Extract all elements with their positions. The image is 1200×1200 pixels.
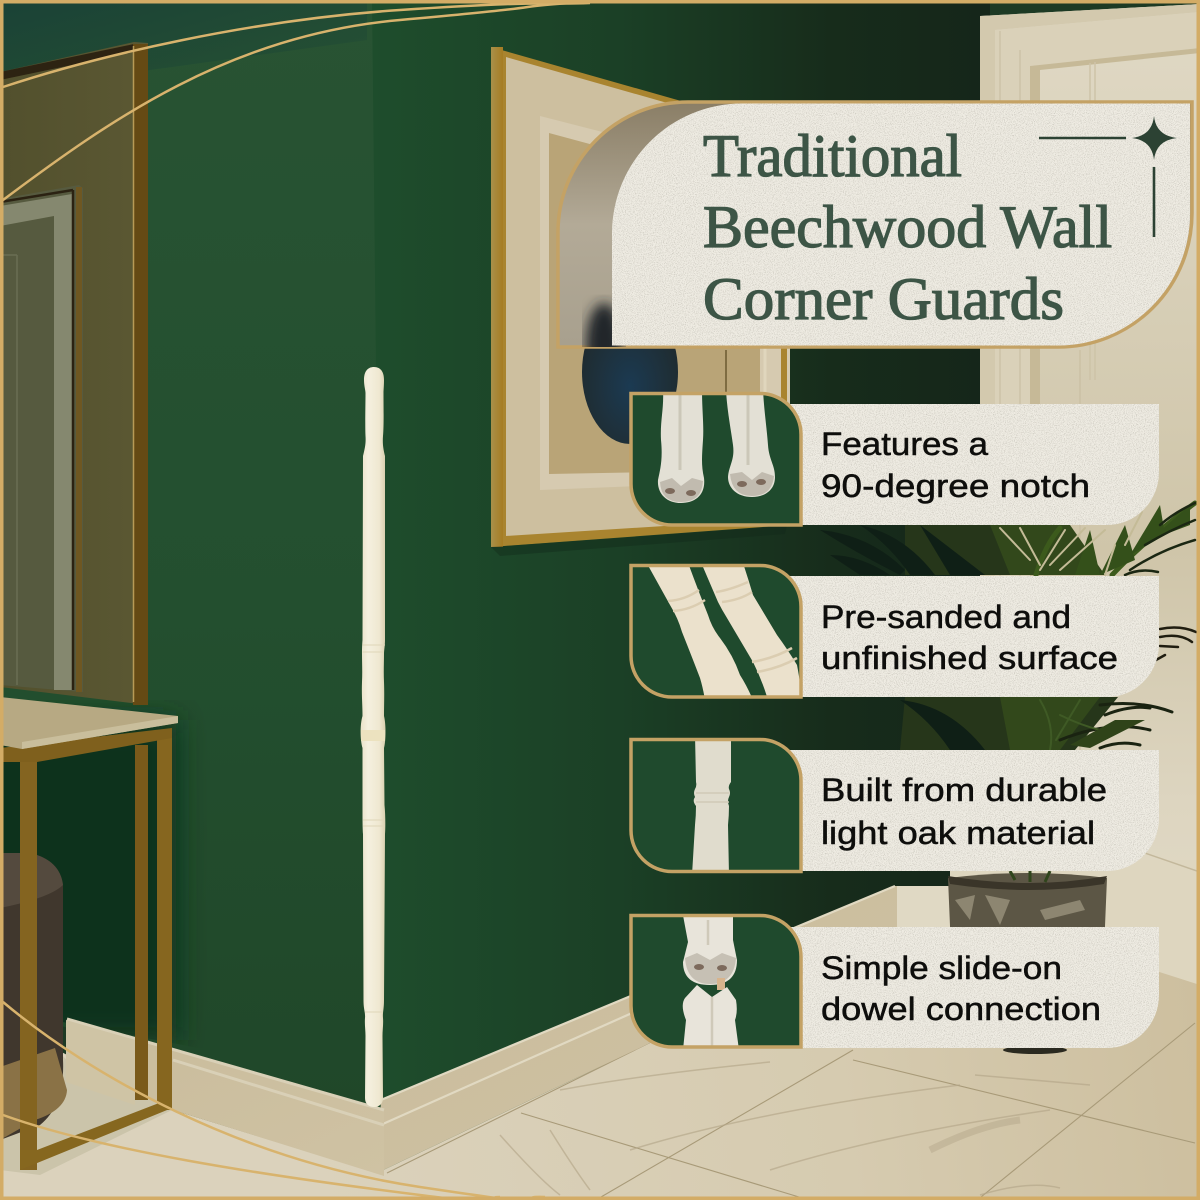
canvas bbox=[549, 133, 760, 474]
abstract blob bbox=[582, 300, 678, 444]
panel: feature 2 bbox=[631, 560, 1159, 700]
frame highlight side bbox=[491, 47, 503, 547]
dark reflection through glass bbox=[582, 295, 626, 347]
panel: feature 4 bbox=[631, 910, 1159, 1050]
door baseboard top line bbox=[1107, 840, 1200, 872]
feature text: Built from durable bbox=[821, 772, 1107, 808]
frame shadow bbox=[491, 526, 787, 556]
curve bottom inner bbox=[3, 1115, 509, 1200]
feature text: Simple slide-on bbox=[821, 950, 1062, 986]
feature text bbox=[821, 772, 1107, 851]
feature text: Features a bbox=[821, 426, 988, 462]
frosted glass backing with gold outline bbox=[558, 102, 1192, 347]
table right leg bbox=[157, 730, 172, 1110]
card bbox=[790, 404, 1159, 525]
outer frame bbox=[491, 47, 790, 547]
card bbox=[790, 927, 1159, 1048]
panel: feature 1 bbox=[631, 390, 1159, 525]
bright palm fronds bbox=[1000, 503, 1196, 750]
foliage mass bbox=[900, 525, 1118, 750]
feature text bbox=[821, 599, 1118, 676]
floor bbox=[0, 905, 1200, 1200]
table apron bbox=[0, 728, 172, 762]
table front leg bbox=[20, 748, 37, 1170]
card bbox=[790, 576, 1159, 697]
baseboard end block bbox=[897, 886, 950, 960]
table marble top bbox=[0, 697, 178, 749]
baseboard: left wall bbox=[67, 1019, 384, 1176]
mirror on left wall bbox=[0, 42, 148, 705]
card texture bbox=[790, 576, 1159, 697]
table back legs bbox=[135, 745, 148, 1100]
floor under table bbox=[0, 1000, 172, 1175]
feature text: unfinished surface bbox=[821, 640, 1118, 676]
table bottom bar bbox=[20, 1098, 172, 1170]
mirror reflection of door bbox=[0, 185, 83, 692]
panel: feature 3 bbox=[631, 735, 1159, 875]
pot bbox=[948, 873, 1107, 1054]
door and frame bbox=[980, 4, 1200, 1000]
corner guard product bbox=[361, 367, 386, 1107]
thumbnail: sanded surface bbox=[631, 560, 802, 700]
card bbox=[790, 750, 1159, 871]
feature text: dowel connection bbox=[821, 991, 1101, 1027]
feature text bbox=[821, 950, 1101, 1027]
wall: left bbox=[0, 0, 384, 1110]
decorative gold curves bbox=[3, 3, 590, 1200]
wall: right bbox=[367, 0, 990, 1176]
stool bbox=[0, 853, 67, 1140]
baseboard moulding lines bbox=[376, 886, 895, 1127]
cream panel bbox=[612, 104, 1190, 346]
inner mat bbox=[540, 116, 790, 490]
feature text: 90-degree notch bbox=[821, 468, 1090, 504]
left baseboard moulding bbox=[67, 1019, 384, 1125]
plant and pot bbox=[820, 503, 1196, 1054]
door baseboard bbox=[950, 860, 1200, 985]
thumbnail: notch bbox=[631, 390, 801, 525]
paper texture bbox=[612, 104, 1190, 346]
mirror top edge bbox=[0, 44, 134, 80]
baseboard under table bbox=[66, 1020, 135, 1105]
mirror gold side bbox=[133, 44, 148, 705]
curve top outer bbox=[3, 3, 590, 87]
dark foliage fronds over wall bbox=[820, 525, 985, 750]
panel: title bbox=[556, 100, 1194, 349]
stems above pot bbox=[1010, 871, 1050, 882]
card texture bbox=[790, 927, 1159, 1048]
icon: sparkle with rule lines bbox=[1039, 116, 1177, 237]
thumbnail: dowel connection bbox=[631, 910, 801, 1050]
wall shadow behind table bbox=[0, 720, 176, 1040]
baseboard: right wall bbox=[377, 886, 950, 1173]
mat bbox=[506, 57, 790, 536]
title: Beechwood Wall bbox=[703, 194, 1112, 260]
card texture bbox=[790, 404, 1159, 525]
feature text: light oak material bbox=[821, 815, 1095, 851]
foliage bright mass bbox=[990, 525, 1105, 750]
guard grooves bbox=[362, 645, 385, 1012]
painting on wall bbox=[491, 47, 790, 556]
curve top inner bbox=[3, 3, 570, 200]
title: Traditional bbox=[703, 123, 962, 189]
feature text: Pre-sanded and bbox=[821, 599, 1071, 635]
feature text bbox=[821, 426, 1090, 504]
title bbox=[703, 123, 1112, 332]
title: Corner Guards bbox=[703, 266, 1064, 332]
thumbnail: oak material bbox=[631, 735, 801, 875]
table top front edge bbox=[22, 716, 178, 749]
curve bottom outer bbox=[3, 1002, 545, 1200]
mirror body bbox=[0, 42, 148, 705]
card texture bbox=[790, 750, 1159, 871]
console table and stool bbox=[0, 697, 178, 1175]
wall shadow above mirror bbox=[0, 0, 367, 100]
floor tile lines and veins bbox=[387, 1023, 1195, 1197]
guard turned band bbox=[361, 730, 385, 741]
